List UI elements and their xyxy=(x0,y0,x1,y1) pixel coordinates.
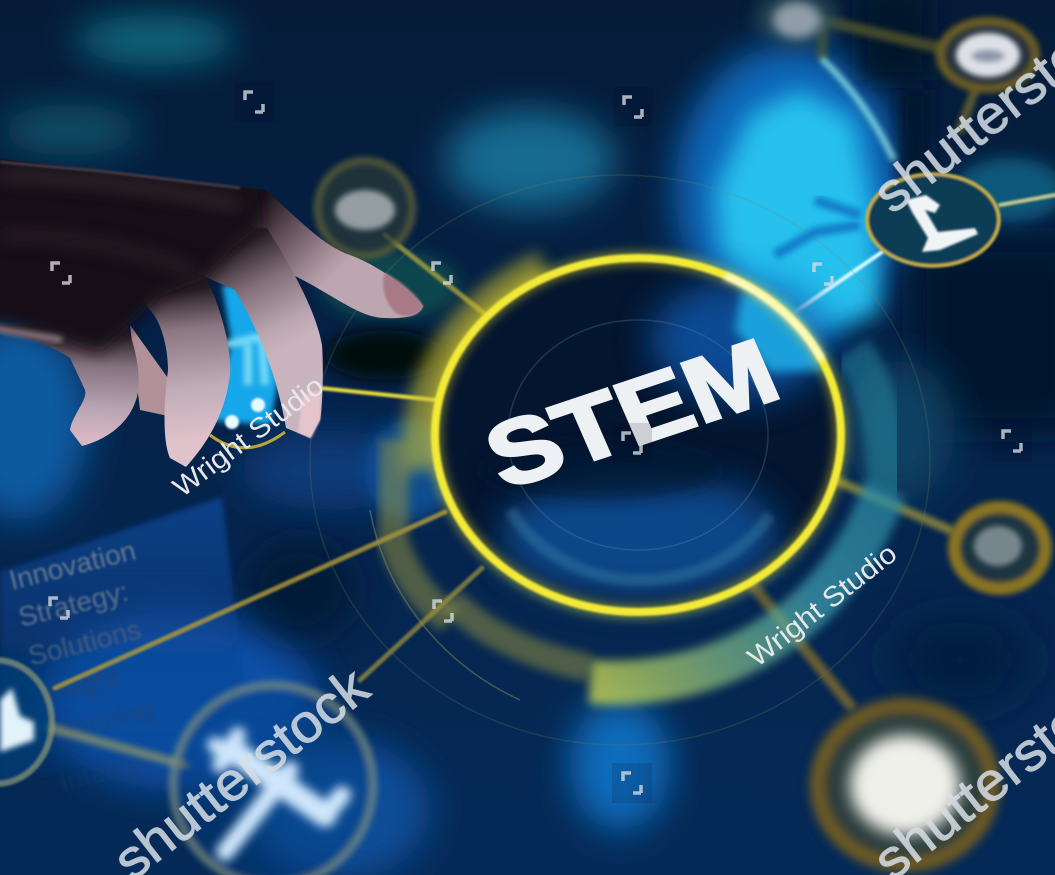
watermark corner icons xyxy=(50,82,1032,803)
node: bottom right bright xyxy=(817,705,993,865)
middle finger xyxy=(190,225,323,438)
back of hand shadow, clipped to the hand outline xyxy=(0,150,262,352)
nail: index xyxy=(383,273,423,316)
watermark: Wright Studio right: Wright Studio xyxy=(742,537,903,673)
left data table: Innovation xyxy=(6,534,139,596)
STEM title: STEM xyxy=(471,320,793,508)
outer ring segments xyxy=(310,175,930,745)
central ring xyxy=(435,258,841,612)
left data table: Planning xyxy=(44,693,157,749)
little-to-ring finger behind xyxy=(130,325,180,416)
left data table xyxy=(0,497,245,798)
watermark: Wright Studio left: Wright Studio xyxy=(167,370,329,503)
left data table: Solutions xyxy=(25,614,144,672)
node: right xyxy=(954,507,1046,589)
node: top right gear xyxy=(940,21,1036,89)
node: wrench and screwdriver xyxy=(173,685,373,875)
left data table: Internet xyxy=(56,745,156,798)
flask icon behind hand xyxy=(205,285,285,448)
left data table: Strategy: xyxy=(15,576,131,633)
node: top gear xyxy=(317,160,413,256)
ring finger xyxy=(120,270,230,467)
little finger xyxy=(0,322,139,446)
node: top blurred icon xyxy=(755,0,839,46)
nail: middle xyxy=(298,390,321,438)
skin highlights on hand back xyxy=(0,162,240,188)
hand xyxy=(0,150,423,467)
node: left edge xyxy=(0,660,52,784)
left data table: Insight xyxy=(34,660,122,710)
index finger xyxy=(150,178,423,318)
node: microscope xyxy=(867,174,999,266)
